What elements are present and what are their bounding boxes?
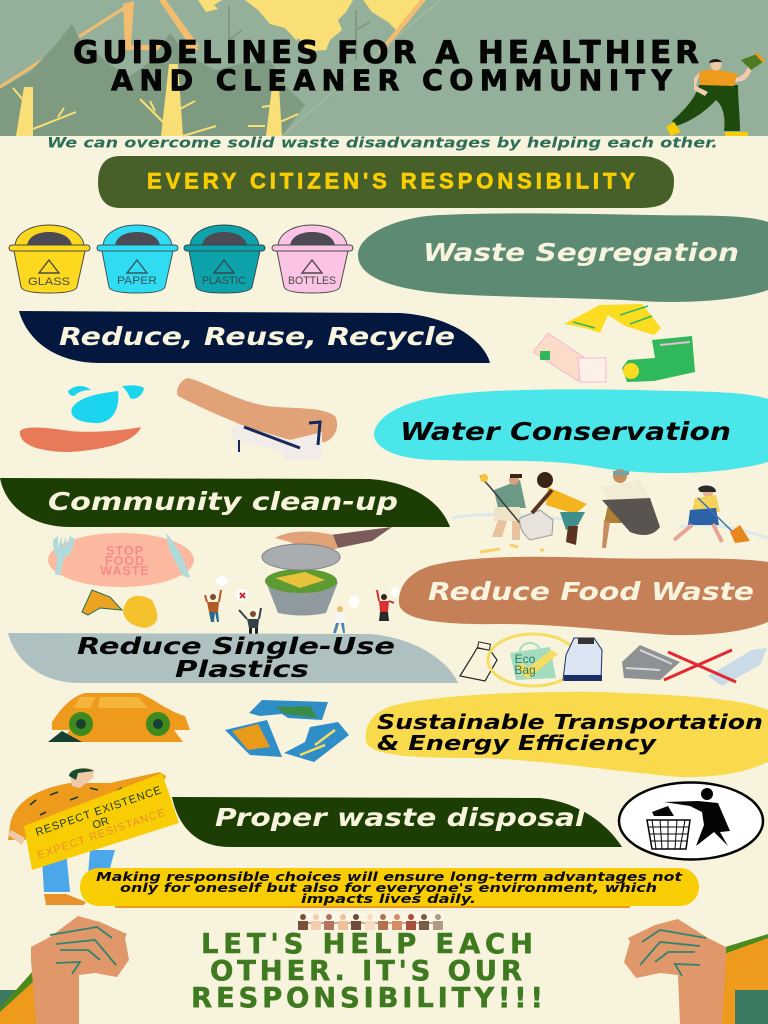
icon: people cleaning up xyxy=(452,469,768,552)
icon: glass bin: GLASS xyxy=(28,276,70,288)
icon: paper bin xyxy=(97,225,178,293)
header banner background with forest xyxy=(0,0,768,136)
icon: stop food waste plate: FOOD xyxy=(105,554,145,568)
illustration: man holding sign: OR xyxy=(91,815,111,832)
icon: stop food waste plate xyxy=(48,533,194,587)
man with bag xyxy=(613,469,627,483)
woman sweeping xyxy=(702,486,714,498)
heading banner: every citizen's responsibility xyxy=(98,156,674,208)
title: AND CLEANER COMMUNITY xyxy=(111,64,672,98)
yellow bottle arrow xyxy=(564,304,661,335)
icon: trash can with food and protesters xyxy=(205,527,399,634)
panel: reduce single-use plastics: Plastics xyxy=(175,655,309,683)
figure with megaphone xyxy=(666,53,764,136)
woman with bag xyxy=(520,510,553,540)
icon: food scraps xyxy=(82,590,157,628)
panel: proper waste disposal: Proper waste disposal xyxy=(215,803,586,832)
icon: left hand holding sign xyxy=(31,916,129,1024)
panel: sustainable transportation: & Energy Efficiency xyxy=(377,731,658,755)
icon: paper bin: PAPER xyxy=(117,275,157,287)
icon: bottles bin: BOTTLES xyxy=(288,275,336,287)
title xyxy=(73,35,699,98)
callout: responsible choices: Making responsible choices will ensure long-term advantages not xyxy=(96,869,683,884)
panel: reduce food waste: Reduce Food Waste xyxy=(428,577,754,606)
icon: recycling bins xyxy=(9,225,353,293)
panel: sustainable transportation xyxy=(366,692,768,777)
icon: electric car xyxy=(48,693,190,742)
protesters xyxy=(210,594,216,600)
icon: plastic bin: PLASTIC xyxy=(202,275,246,287)
icon: hand closing faucet xyxy=(177,378,337,460)
panel: community clean-up xyxy=(0,478,450,527)
icon: no plastic waste xyxy=(622,645,767,686)
icon: tidy man litter bin xyxy=(619,782,763,860)
callout: responsible choices xyxy=(80,868,699,906)
heading banner: every citizen's responsibility: EVERY CITIZEN'S RESPONSIBILITY xyxy=(147,168,635,194)
panel: waste segregation xyxy=(358,213,768,302)
panel: reduce single-use plastics xyxy=(8,632,458,683)
icon: right hand holding sign xyxy=(624,919,726,1024)
illustration: man holding sign: EXPECT RESISTANCE xyxy=(36,807,167,862)
icon: glass bin xyxy=(9,225,90,293)
panel: sustainable transportation: Sustainable Transportation xyxy=(377,710,763,734)
illustration: man holding sign: RESPECT EXISTENCE xyxy=(34,785,163,839)
green can arrow xyxy=(622,336,695,382)
panel: reduce single-use plastics: Reduce Single-Use xyxy=(77,632,395,660)
panel: water conservation xyxy=(374,389,768,473)
icon: water drop over hand xyxy=(20,385,144,452)
icon: clean energy recycling symbol xyxy=(225,700,349,762)
panel: waste segregation: Waste Segregation xyxy=(423,238,739,267)
closing message xyxy=(191,928,543,1014)
title: GUIDELINES FOR A HEALTHIER xyxy=(73,35,699,71)
callout: responsible choices: impacts lives daily. xyxy=(301,891,476,906)
illustration: man holding sign xyxy=(8,768,179,905)
icon: eco bag and reusable bottles xyxy=(460,634,602,686)
icon: plastic bin xyxy=(184,225,265,293)
panel: community clean-up: Community clean-up xyxy=(48,487,398,516)
icon: stop food waste plate: STOP xyxy=(106,544,144,558)
icon: bottles bin xyxy=(272,225,353,293)
panel: water conservation: Water Conservation xyxy=(400,417,731,446)
closing message: RESPONSIBILITY!!! xyxy=(191,982,543,1014)
icon: eco bag and reusable bottles: Bag xyxy=(514,663,536,677)
subtitle: We can overcome solid waste disadvantages by helping each other. xyxy=(47,136,718,152)
footer: teal ground and orange hills xyxy=(0,906,768,1024)
icon: chain of people xyxy=(296,913,444,931)
icon: stop food waste plate: WASTE xyxy=(100,564,150,578)
callout: responsible choices: only for oneself but also for everyone's environment, which xyxy=(120,880,657,895)
closing message: LET'S HELP EACH xyxy=(201,928,533,960)
panel: reduce, reuse, recycle: Reduce, Reuse, Recycle xyxy=(59,322,455,351)
icon: recycled materials xyxy=(533,304,695,382)
panel: reduce, reuse, recycle xyxy=(19,311,490,363)
person picking litter xyxy=(494,480,526,508)
icon: eco bag and reusable bottles: Eco xyxy=(515,652,536,666)
closing message: OTHER. IT'S OUR xyxy=(210,955,522,987)
panel: proper waste disposal xyxy=(172,797,622,847)
newspaper arrow xyxy=(533,333,588,381)
panel: reduce food waste xyxy=(399,557,768,635)
